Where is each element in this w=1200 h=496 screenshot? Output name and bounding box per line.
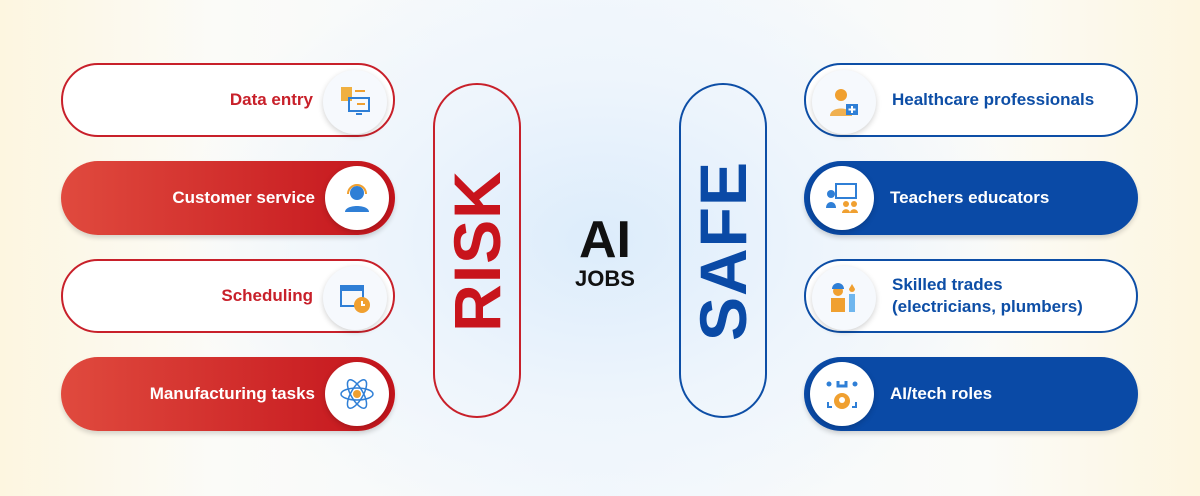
panel: RISK vertical label: [433, 83, 521, 418]
pill: teachers: Teachers educators: [890, 188, 1049, 207]
panel: RISK vertical label: RISK: [440, 170, 514, 331]
icon: doctor: [812, 70, 876, 134]
pill: data entry: [61, 63, 395, 137]
icon: atom: [325, 362, 389, 426]
icon: tradesman: [812, 266, 876, 330]
title: AI JOBS: [575, 211, 635, 291]
pill: skilled trades: Skilled trades: [892, 275, 1003, 294]
pill: data entry: Data entry: [230, 90, 313, 109]
pill: customer service: Customer service: [172, 188, 315, 207]
pill: scheduling: Scheduling: [221, 286, 313, 305]
pill: AI/tech roles: AI/tech roles: [890, 384, 992, 403]
icon: calendar: [323, 266, 387, 330]
icon: teacher: [810, 166, 874, 230]
pill: teachers: [804, 161, 1138, 235]
pill: scheduling: [61, 259, 395, 333]
pill: customer service: [61, 161, 395, 235]
pill: skilled trades: [804, 259, 1138, 333]
pill: skilled trades: (electricians, plumbers): [892, 297, 1083, 316]
pill: healthcare: Healthcare professionals: [892, 90, 1094, 109]
title: AI JOBS: JOBS: [575, 266, 635, 291]
icon: tech: [810, 362, 874, 426]
icon: headset: [325, 166, 389, 230]
pill: manufacturing tasks: Manufacturing tasks: [150, 384, 315, 403]
pill: healthcare: [804, 63, 1138, 137]
title: AI JOBS: AI: [579, 211, 631, 269]
panel: SAFE vertical label: SAFE: [686, 160, 760, 341]
pill: manufacturing tasks: [61, 357, 395, 431]
icon: data entry: [323, 70, 387, 134]
panel: SAFE vertical label: [679, 83, 767, 418]
pill: AI/tech roles: [804, 357, 1138, 431]
